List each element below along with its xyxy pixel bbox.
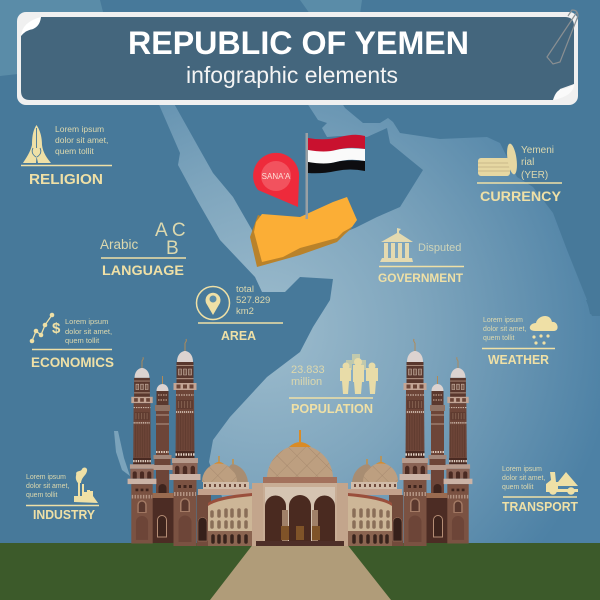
panel: language	[100, 220, 186, 278]
title: REPUBLIC OF YEMEN	[128, 25, 469, 61]
panel: economics: dolor sit amet,	[65, 327, 112, 336]
panel: weather: WEATHER	[488, 353, 549, 367]
panel: language: LANGUAGE	[102, 262, 184, 278]
flag pole	[306, 133, 308, 219]
ground	[0, 543, 600, 600]
panel: religion: dolor sit amet,	[55, 135, 108, 145]
panel: industry: dolor sit amet,	[26, 483, 69, 490]
panel: area: 527.829	[236, 295, 270, 306]
capital label: SANA'A	[262, 172, 291, 181]
icon: dump truck	[546, 472, 578, 495]
panel: transport	[502, 466, 578, 514]
central building	[256, 477, 344, 546]
panel: area	[196, 284, 283, 343]
map: red sea, gulf and ocean	[157, 100, 600, 545]
panel: area: AREA	[221, 329, 256, 343]
panel: religion: RELIGION	[29, 172, 103, 188]
path	[210, 543, 391, 600]
panel: industry: Lorem ipsum	[26, 474, 66, 481]
panel: currency: (YER)	[521, 170, 548, 181]
icon: praying hands	[23, 125, 51, 163]
panel: religion	[21, 124, 112, 188]
panel: weather	[482, 316, 558, 367]
panel: language: B	[166, 238, 179, 259]
panel: language: Arabic	[100, 237, 139, 252]
panel: industry: INDUSTRY	[33, 508, 96, 522]
flag	[308, 135, 365, 173]
panel: currency: CURRENCY	[480, 189, 561, 204]
panel: economics: quem tollit	[65, 336, 100, 345]
panel: population	[289, 354, 378, 416]
icon: letters: A C	[155, 220, 186, 241]
subtitle: infographic elements	[186, 62, 398, 88]
banner	[17, 10, 578, 105]
panel: transport: quem tollit	[502, 484, 533, 491]
panel: weather: dolor sit amet,	[483, 326, 526, 333]
icon: government building	[380, 228, 413, 262]
panel: economics: ECONOMICS	[31, 355, 114, 370]
panel: religion: Lorem ipsum	[55, 124, 104, 134]
panel: currency	[477, 143, 562, 204]
panel: area: total	[236, 284, 254, 295]
panel: transport: dolor sit amet,	[502, 475, 545, 482]
panel: government: GOVERNMENT	[378, 273, 463, 285]
mosque	[128, 339, 472, 546]
panel: transport: TRANSPORT	[502, 500, 578, 514]
central dome	[267, 430, 333, 477]
map: african lake	[114, 431, 130, 476]
panel: industry: quem tollit	[26, 492, 57, 499]
panel: government	[378, 228, 464, 285]
capital pin	[253, 153, 299, 207]
map: upper water	[300, 0, 362, 14]
map: sri lanka	[586, 300, 600, 316]
panel: transport: Lorem ipsum	[502, 466, 542, 473]
panel: currency: Yemeni	[521, 145, 554, 156]
panel: religion: quem tollit	[55, 146, 94, 156]
map: upper left water	[0, 0, 105, 76]
panel: weather: Lorem ipsum	[483, 317, 523, 324]
yemen map	[250, 197, 357, 267]
panel: industry	[26, 468, 99, 522]
icon: rain cloud	[530, 316, 558, 345]
icon: chart and dollar: $	[52, 320, 61, 337]
icon: people	[340, 354, 378, 394]
mosque right half	[336, 339, 472, 546]
panel: weather: quem tollit	[483, 335, 514, 342]
panel: economics	[30, 313, 114, 370]
panel: currency: rial	[521, 157, 534, 168]
mosque left half	[128, 339, 264, 546]
panel: population: POPULATION	[291, 402, 373, 416]
icon: location pin circle	[196, 286, 230, 320]
panel: population: million	[291, 376, 322, 388]
panel: economics: Lorem ipsum	[65, 317, 108, 326]
icon: paper clip	[547, 10, 578, 64]
panel: government: Disputed	[418, 242, 461, 254]
panel: population: 23.833	[291, 364, 325, 376]
panel: area: km2	[236, 306, 254, 317]
icon: factory	[74, 468, 98, 503]
icon: coins	[478, 143, 519, 176]
